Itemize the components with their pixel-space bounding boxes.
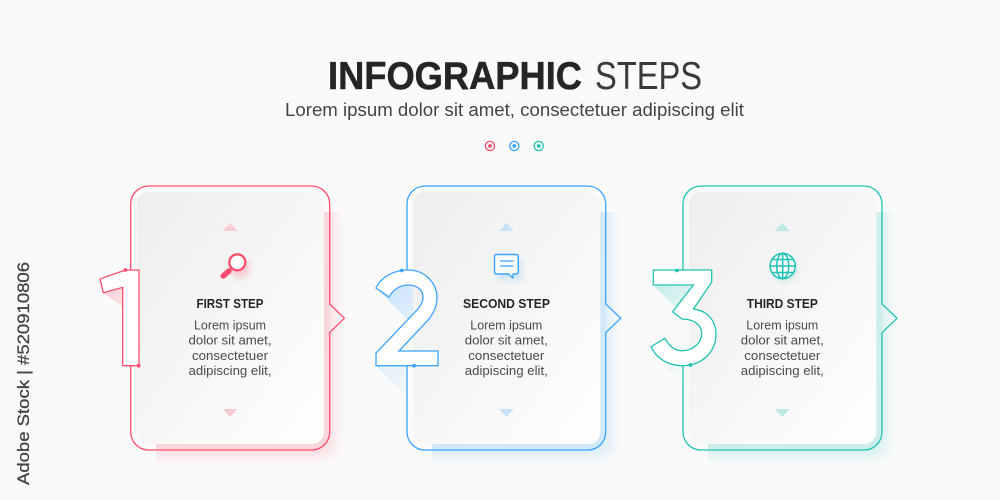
- step body text: dolor sit amet,: [465, 332, 548, 348]
- subtitle: Lorem ipsum dolor sit amet, consectetuer adipiscing elit: [285, 100, 744, 120]
- step body text: Lorem ipsum: [194, 317, 266, 332]
- icon: magnifier: [223, 254, 250, 278]
- number 1: [100, 268, 141, 368]
- step heading: FIRST STEP: [196, 296, 264, 311]
- panel: first step: [100, 186, 344, 458]
- step body text: consectetuer: [192, 348, 269, 363]
- infographic canvas: [16, 62, 898, 486]
- step body text: [188, 317, 272, 378]
- step body text: Lorem ipsum: [470, 317, 542, 332]
- step body text: adipiscing elit,: [188, 363, 272, 378]
- step body text: adipiscing elit,: [465, 363, 548, 378]
- panel: second step: [376, 186, 621, 458]
- step body text: [741, 317, 824, 378]
- step body text: consectetuer: [468, 348, 545, 363]
- step body text: adipiscing elit,: [741, 363, 824, 378]
- title: STEPS: [595, 55, 702, 98]
- indicator dots: [485, 141, 543, 151]
- title: INFOGRAPHIC: [328, 55, 582, 98]
- icon: globe: [770, 253, 797, 282]
- icon: speech bubble: [494, 254, 522, 280]
- step body text: consectetuer: [744, 348, 821, 363]
- number 2: [376, 269, 438, 368]
- step body text: [465, 317, 548, 378]
- step heading: SECOND STEP: [463, 296, 550, 311]
- step body text: dolor sit amet,: [741, 332, 824, 348]
- vertical side label: Adobe Stock | #520910806: [14, 262, 33, 485]
- step body text: Lorem ipsum: [746, 317, 818, 332]
- number 3: [651, 269, 716, 367]
- step body text: dolor sit amet,: [188, 332, 272, 348]
- step heading: THIRD STEP: [747, 296, 818, 311]
- panel: third step: [651, 186, 897, 458]
